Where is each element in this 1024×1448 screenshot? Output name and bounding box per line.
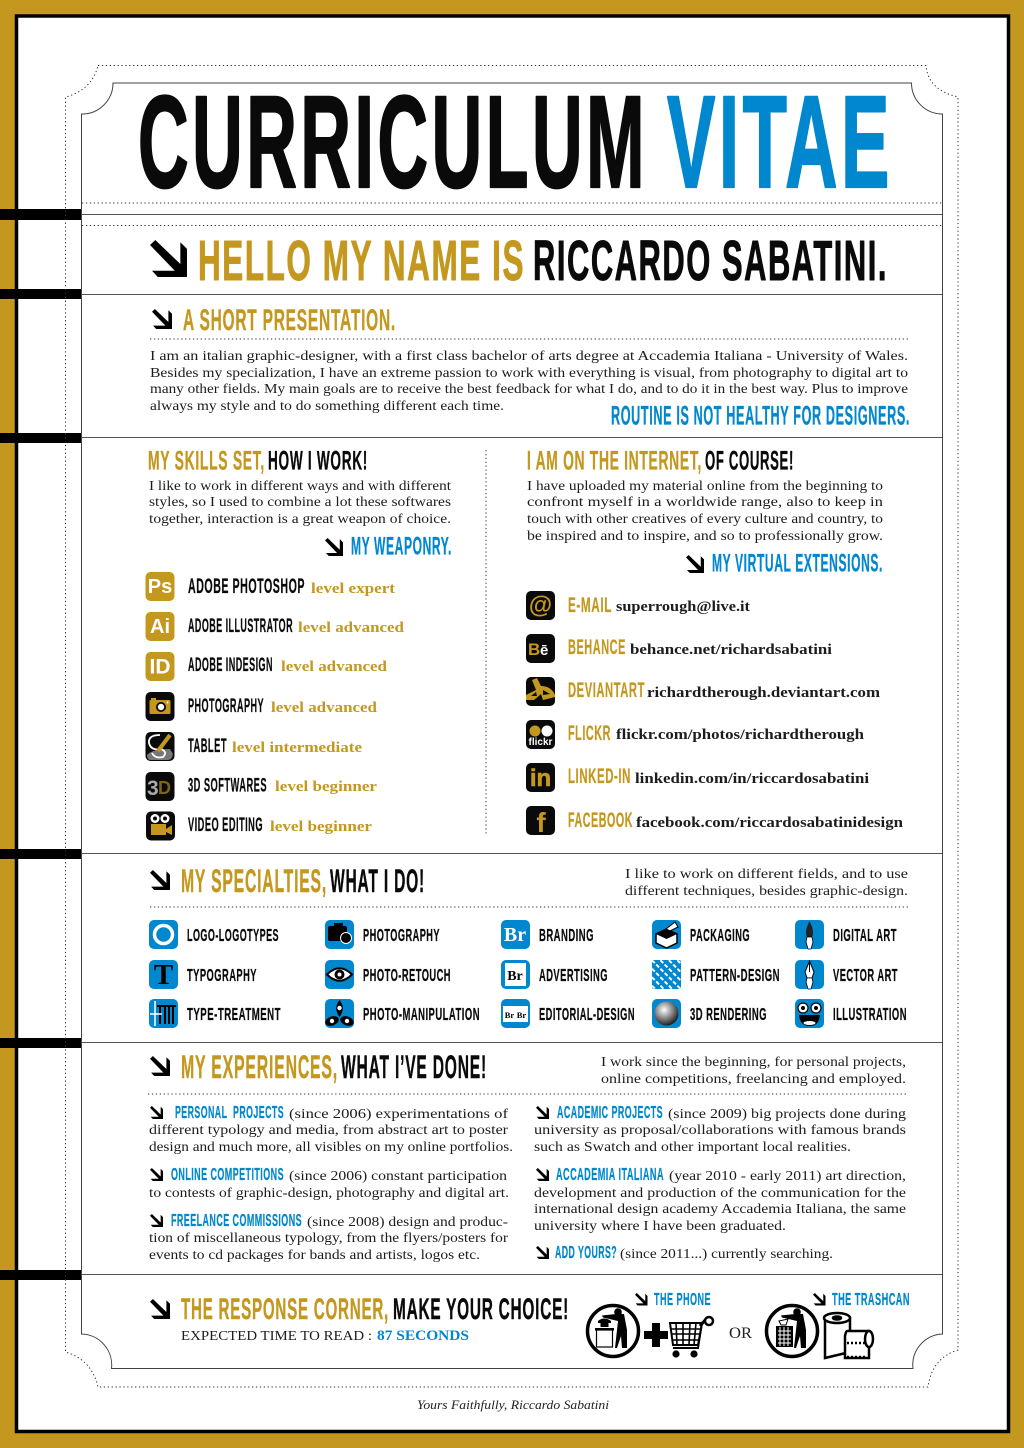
skill: indesign: ADOBE INDESIGN (188, 654, 273, 676)
panel: specialties (149, 863, 908, 1028)
icon: paper rolls (824, 1313, 873, 1358)
skill: video editing: level beginner (270, 819, 373, 835)
experience: personal projects: PERSONAL PROJECTS (175, 1102, 284, 1122)
icon: shopping cart (670, 1317, 713, 1358)
skill: 3d softwares: level beginner (275, 779, 378, 795)
experience: add yours: (since 2011...) currently searching. (620, 1247, 833, 1262)
text: or: OR (729, 1325, 752, 1342)
link: e-mail: superrough@live.it (616, 599, 750, 615)
heading: experiences: MY EXPERIENCES, (181, 1049, 338, 1085)
panel: short presentation (150, 304, 910, 430)
skill: indesign: level advanced (281, 659, 387, 675)
experience: personal projects: (since 2006) experimentations of (289, 1107, 508, 1122)
link: facebook: facebook.com/riccardosabatinidesign (636, 815, 903, 831)
heading: specialties: MY SPECIALTIES, (181, 863, 327, 899)
heading: hello my name is: HELLO MY NAME IS (198, 229, 525, 293)
icon: arrow (152, 309, 172, 329)
specialty: digital art (795, 920, 897, 949)
experience: accademia italiana: (year 2010 - early 2011) art direction, (669, 1169, 906, 1184)
specialty: advertising: ADVERTISING (539, 965, 608, 985)
skill: tablet: TABLET (188, 735, 227, 757)
link: linked-in: LINKED-IN (568, 765, 631, 788)
specialty: editorial-design (501, 999, 635, 1028)
text block: experiences intro: I work since the beginning, for personal projects, (601, 1055, 906, 1070)
panel: internet: OF COURSE! (705, 446, 794, 476)
specialty: advertising: Br (507, 969, 523, 984)
experience: online competitions: (since 2006) constant participation (289, 1169, 507, 1184)
specialty: packaging: PACKAGING (690, 925, 750, 945)
text block: internet intro: be inspired and to inspire, and so to professionally grow. (527, 529, 883, 544)
specialty: branding: BRANDING (539, 925, 594, 945)
text: MY WEAPONRY. (351, 532, 452, 560)
text: expected time: 87 SECONDS (377, 1328, 469, 1344)
skill: video editing: VIDEO EDITING (188, 814, 263, 836)
experience: accademia italiana: ACCADEMIA ITALIANA (556, 1164, 664, 1184)
text block: internet intro: confront myself in a worldwide range, also to keep in (527, 495, 883, 510)
panel: internet (526, 446, 903, 838)
experience: academic projects: university as proposal/collaborations with famous brands (534, 1123, 906, 1138)
text block: experiences intro: online competitions, freelancing and employed. (601, 1072, 906, 1087)
link: behance (526, 634, 832, 663)
experience: add yours (536, 1242, 833, 1262)
heading: internet: I AM ON THE INTERNET, (527, 446, 702, 476)
specialty: photography (325, 920, 440, 949)
skill: tablet (146, 732, 363, 761)
link: linked-in: in (530, 765, 551, 792)
experience: freelance commissions: (since 2008) design and produc- (307, 1215, 508, 1230)
link: facebook: FACEBOOK (568, 809, 633, 832)
skill: 3d softwares: 3D SOFTWARES (188, 774, 267, 796)
specialty: photo-manipulation (324, 999, 480, 1028)
experience: accademia italiana (534, 1164, 906, 1234)
experience: personal projects (149, 1102, 513, 1155)
text block: internet intro: touch with other creatives of every culture and country, to (527, 512, 883, 527)
skill: video editing (146, 812, 373, 840)
heading: a short presentation: A SHORT PRESENTATION. (183, 304, 396, 337)
specialty: photo-manipulation: PHOTO-MANIPULATION (363, 1004, 480, 1024)
specialty: editorial-design: EDITORIAL-DESIGN (539, 1004, 635, 1024)
text block: skills intro: I like to work in different ways and with different (149, 479, 451, 494)
icon: phone in bin (588, 1306, 638, 1356)
link: flickr (526, 720, 864, 749)
skill: illustrator: level advanced (298, 620, 404, 636)
experience: online competitions (149, 1164, 509, 1201)
skill: illustrator: ADOBE ILLUSTRATOR (188, 615, 293, 637)
specialty: logo (149, 920, 279, 949)
footer signature: Yours Faithfully, Riccardo Sabatini (417, 1398, 610, 1412)
section dividers (82, 203, 942, 1274)
text block: skills intro (149, 479, 451, 527)
link: e-mail (526, 591, 750, 620)
skill: photography (146, 692, 377, 721)
specialty: vector art: VECTOR ART (833, 965, 898, 985)
link: behance: B (528, 640, 540, 659)
text block: presentation: Besides my specialization, I have an extreme passion to work with everything is visual, from photography to digital art to (150, 366, 908, 381)
specialty: branding (501, 920, 594, 949)
specialty: editorial-design: Br (517, 1010, 526, 1020)
specialty: advertising (501, 960, 608, 989)
icon: arrow (150, 240, 187, 277)
specialty: typography: TYPOGRAPHY (187, 965, 257, 985)
experience: accademia italiana: university where I have been graduated. (534, 1219, 786, 1234)
skill: indesign (146, 652, 387, 681)
label: the phone: THE PHONE (654, 1289, 711, 1309)
icon: plus (644, 1323, 668, 1347)
specialty: photography: PHOTOGRAPHY (363, 925, 440, 945)
experience: freelance commissions: tion of miscellaneous typology, from the flyers/posters for (149, 1231, 508, 1246)
binding bars (0, 209, 82, 1280)
panel: skills (146, 446, 452, 840)
specialty: editorial-design: Br (505, 1010, 514, 1020)
text block: presentation (150, 349, 908, 414)
specialty: photo-retouch: PHOTO-RETOUCH (363, 965, 451, 985)
text block: presentation: always my style and to do something different each time. (150, 399, 504, 414)
specialty: pattern-design: PATTERN-DESIGN (690, 965, 780, 985)
experience: freelance commissions: FREELANCE COMMISSIONS (171, 1210, 302, 1230)
label: the phone (635, 1289, 711, 1309)
skill: 3d softwares: 3 (147, 777, 159, 800)
specialty: illustration (795, 999, 907, 1028)
link: flickr: flickr (529, 737, 553, 748)
link: flickr: FLICKR (568, 722, 611, 745)
skill: photoshop (146, 572, 395, 601)
experience: online competitions: to contests of graphic-design, photography and digital art. (149, 1186, 509, 1201)
experience: academic projects: such as Swatch and other important local realities. (534, 1140, 851, 1155)
panel: experiences: WHAT I’VE DONE! (341, 1049, 487, 1085)
experience: accademia italiana: development and production of the communication for the (534, 1186, 906, 1201)
specialty: 3d rendering (652, 999, 767, 1028)
label: the trashcan: THE TRASHCAN (832, 1289, 910, 1309)
specialty: illustration: ILLUSTRATION (833, 1004, 907, 1024)
skill: illustrator: Ai (150, 616, 170, 638)
text block: specialties intro: different techniques, besides graphic-design. (625, 884, 908, 899)
heading: response corner: MAKE YOUR CHOICE! (393, 1293, 569, 1326)
specialty: vector art (795, 960, 898, 989)
text block: internet intro: I have uploaded my material online from the beginning to (527, 479, 883, 494)
main panel outline (82, 83, 942, 1368)
experience: personal projects: design and much more, all visibles on my online portfolios. (149, 1140, 513, 1155)
link: facebook (526, 806, 903, 838)
link: behance: behance.net/richardsabatini (630, 642, 832, 658)
heading: skills: HOW I WORK! (268, 446, 368, 476)
link: facebook: f (536, 807, 546, 838)
specialty: digital art: DIGITAL ART (833, 925, 897, 945)
link: deviantart (526, 677, 880, 706)
text block: skills intro: together, interaction is a great weapon of choice. (149, 512, 451, 527)
skill: photoshop: ADOBE PHOTOSHOP (188, 575, 305, 598)
specialty: typography (149, 959, 257, 991)
link: linked-in (526, 763, 869, 792)
link: deviantart: DEVIANTART (568, 679, 645, 702)
experience: academic projects: ACADEMIC PROJECTS (557, 1102, 663, 1122)
panel: experiences (149, 1049, 906, 1263)
experience: online competitions: ONLINE COMPETITIONS (171, 1164, 284, 1184)
heading: my virtual extensions (686, 550, 883, 578)
heading: response corner: THE RESPONSE CORNER, (181, 1293, 389, 1326)
skill: 3d softwares (146, 772, 378, 801)
skill: photoshop: level expert (311, 581, 395, 597)
link: deviantart: richardtherough.deviantart.com (647, 685, 880, 701)
skill: indesign: ID (150, 656, 170, 678)
link: e-mail: E-MAIL (568, 594, 612, 617)
experience: add yours: ADD YOURS? (555, 1242, 617, 1262)
skill: photoshop: Ps (148, 576, 172, 598)
skill: photography: level advanced (271, 700, 377, 716)
link: e-mail: @ (529, 592, 552, 619)
experience: freelance commissions: events to cd packages for bands and artists, logos etc. (149, 1248, 480, 1263)
skill: illustrator (146, 612, 404, 641)
specialty: 3d rendering: 3D RENDERING (690, 1004, 767, 1024)
specialty: branding: Br (504, 924, 526, 946)
text block: skills intro: styles, so I used to combine a lot these softwares (149, 495, 451, 510)
text block: specialties intro (625, 867, 908, 899)
panel: specialties: WHAT I DO! (330, 863, 425, 899)
link: behance: BEHANCE (568, 636, 626, 659)
heading: my weaponry (325, 532, 452, 560)
text: expected time (181, 1328, 469, 1344)
text block: experiences intro (601, 1055, 906, 1087)
specialty: packaging (652, 920, 750, 949)
text block: presentation: I am an italian graphic-designer, with a first class bachelor of arts degree at Accademia Italiana - University of Wales. (150, 349, 908, 364)
skill: photography: PHOTOGRAPHY (188, 695, 264, 717)
link: linked-in: linkedin.com/in/riccardosabatini (635, 771, 869, 787)
specialty: type-treatment: TYPE-TREATMENT (187, 1004, 281, 1024)
specialty: pattern-design (652, 960, 780, 989)
panel: response corner (150, 1289, 910, 1358)
specialty: logo: LOGO-LOGOTYPES (187, 925, 279, 945)
label: the trashcan (813, 1289, 910, 1309)
icon: trash in bin (766, 1306, 818, 1356)
skill: 3d softwares: D (158, 778, 171, 798)
experience: accademia italiana: international design academy Accademia Italiana, the same (534, 1202, 906, 1217)
link: flickr: flickr.com/photos/richardtherough (616, 727, 864, 743)
text block: internet intro (527, 479, 883, 544)
experience: academic projects: (since 2009) big projects done during (668, 1107, 906, 1122)
text block: specialties intro: I like to work on different fields, and to use (625, 867, 908, 882)
experience: personal projects: different typology and media, from abstract art to poster (149, 1123, 508, 1138)
link: behance: ē (540, 642, 548, 659)
specialty: typography: T (154, 959, 173, 991)
skill: tablet: level intermediate (232, 740, 363, 756)
text block: presentation: many other fields. My main goals are to receive the best feedback for what I do, and to do it in the best way. Plus to improve (150, 382, 908, 397)
specialty: type-treatment (149, 999, 281, 1028)
specialty: photo-retouch (325, 960, 451, 989)
experience: freelance commissions (149, 1210, 508, 1263)
dotted outer border (66, 66, 958, 1387)
text: expected time: EXPECTED TIME TO READ : (181, 1329, 372, 1344)
heading: skills: MY SKILLS SET, (148, 446, 265, 476)
experience: academic projects (534, 1102, 906, 1155)
